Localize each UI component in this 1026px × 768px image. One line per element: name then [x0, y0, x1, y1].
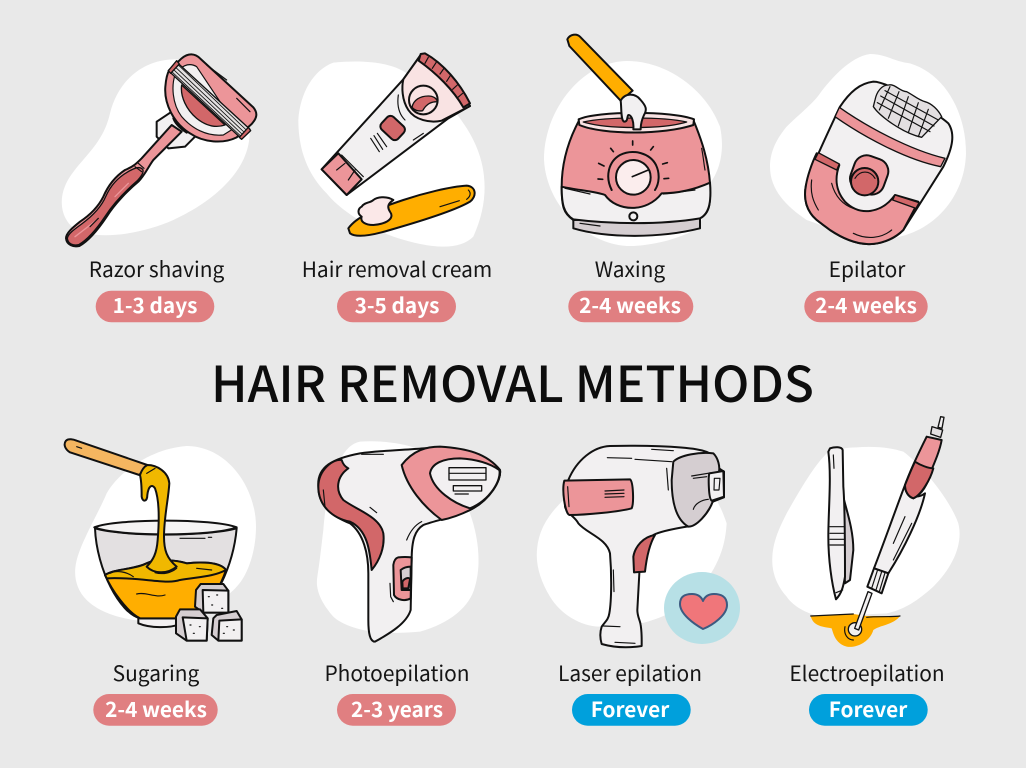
label: laser epilation: Laser epilation: [558, 658, 702, 688]
title: HAIR REMOVAL METHODS: [211, 346, 814, 417]
label: electroepilation: Electroepilation: [789, 658, 945, 688]
badge: forever: Forever: [591, 693, 670, 723]
panel: epilator: [770, 54, 966, 322]
icon: epilator: [770, 54, 966, 244]
panel: electroepilation: [772, 417, 960, 726]
badge: 2-4 weeks: 2-4 weeks: [579, 289, 681, 319]
badge: forever: [809, 693, 928, 726]
panel: waxing: [544, 35, 722, 322]
icon: razor: [62, 54, 256, 246]
badge: forever: Forever: [829, 693, 908, 723]
icon: laser device: [537, 446, 727, 647]
panel: photoepilation: [317, 441, 500, 726]
badge: 1-3 days: 1-3 days: [113, 289, 197, 319]
panel: razor shaving: [62, 54, 256, 322]
label: razor shaving: Razor shaving: [89, 254, 224, 284]
icon: heart badge: [664, 572, 740, 644]
badge: 1-3 days: [96, 289, 214, 322]
badge: forever: [572, 693, 691, 726]
label: hair removal cream: Hair removal cream: [302, 254, 492, 284]
panel: laser epilation: [537, 446, 740, 726]
icon: cream tube and spatula: [298, 53, 485, 247]
label: epilator: Epilator: [829, 254, 906, 284]
panel: sugaring: [65, 439, 256, 726]
badge: 2-3 years: 2-3 years: [351, 693, 443, 723]
panel: hair removal cream: [298, 53, 492, 322]
icon: photoepilation device: [317, 441, 500, 642]
icon: wax pot: [544, 35, 722, 246]
badge: 2-4 weeks: 2-4 weeks: [105, 693, 207, 723]
icon: sugar paste bowl: [65, 439, 256, 641]
label: photoepilation: Photoepilation: [324, 658, 470, 688]
badge: 3-5 days: 3-5 days: [355, 289, 439, 319]
label: waxing: Waxing: [595, 254, 665, 284]
badge: 3-5 days: [337, 289, 456, 322]
label: sugaring: Sugaring: [113, 658, 200, 688]
icon: tweezers and electrolysis pen: [772, 417, 960, 647]
badge: 2-4 weeks: 2-4 weeks: [815, 289, 917, 319]
